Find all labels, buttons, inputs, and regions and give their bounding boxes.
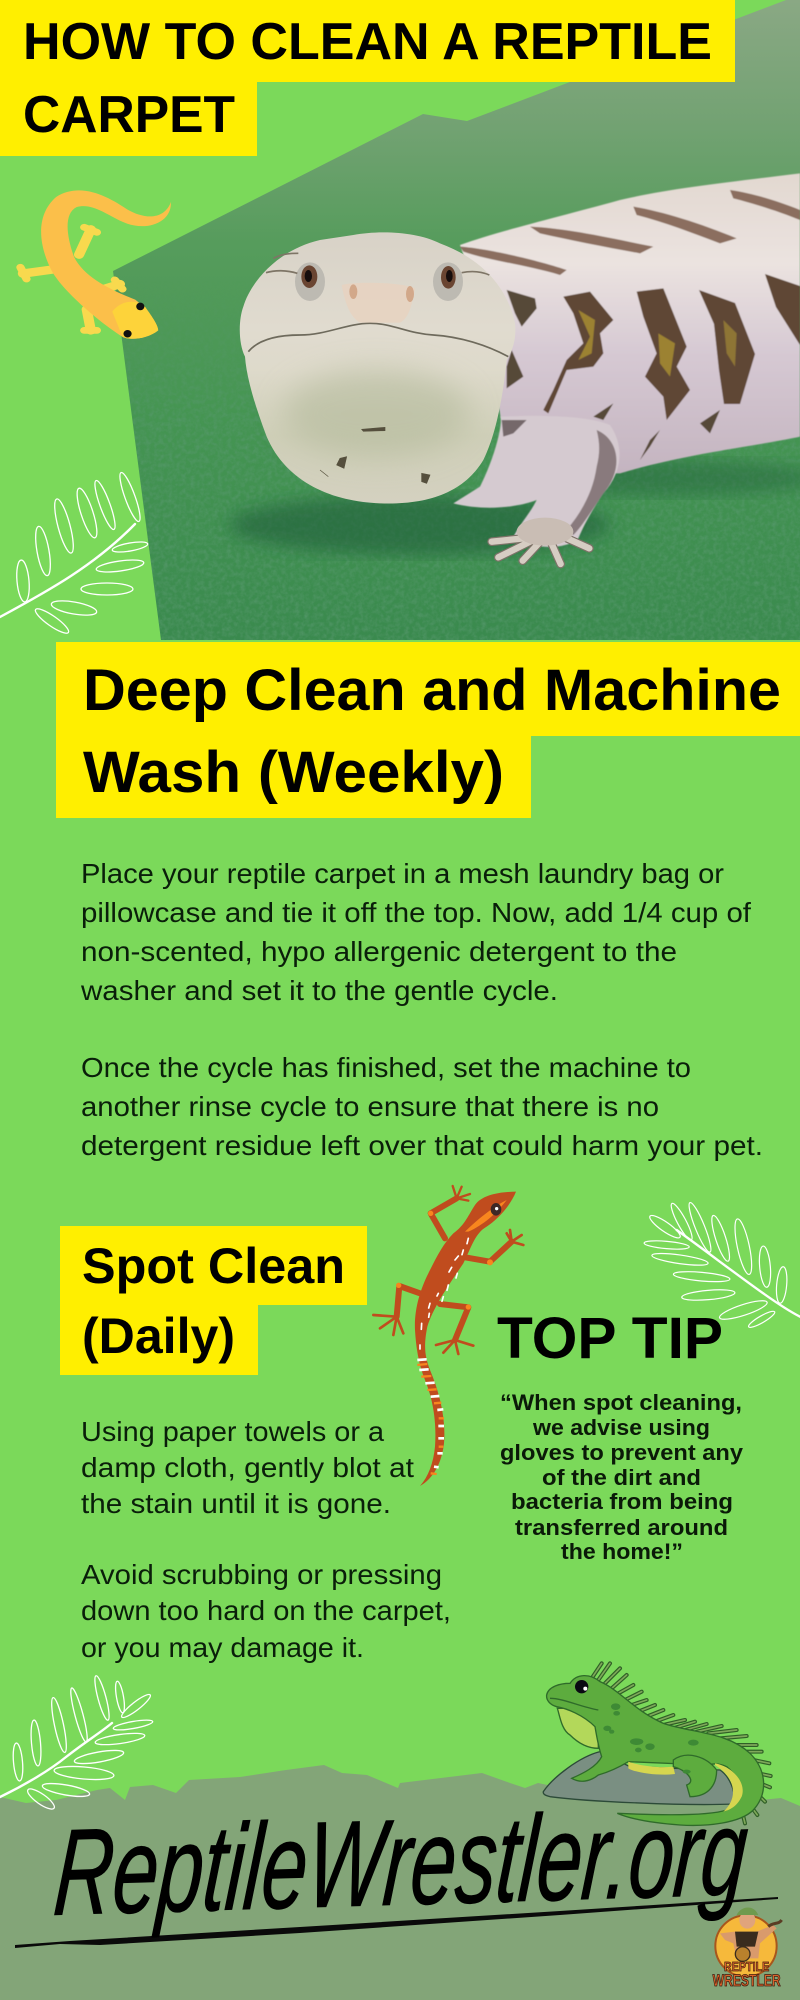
decorative leaf: bottom left: [0, 1675, 153, 1812]
icon: green iguana on rock: [543, 1663, 771, 1825]
icon: orange lizard: [373, 1186, 523, 1486]
heading: spot clean daily: [60, 1226, 367, 1375]
logo: reptile wrestler badge: REPTILE: [724, 1960, 769, 1974]
heading: deep clean and machine wash: Wash (Weekly): [83, 740, 504, 805]
text block: spot clean instructions: the stain until it is gone.: [81, 1488, 391, 1519]
decorative leaf: left of photo: [0, 471, 148, 637]
text block: spot clean instructions: or you may damage it.: [81, 1632, 364, 1663]
text block: spot clean instructions: Using paper towels or a: [81, 1416, 385, 1447]
text block: machine wash instructions: Place your reptile carpet in a mesh laundry bag or: [81, 858, 724, 889]
title banner: HOW TO CLEAN A REPTILE: [23, 13, 712, 71]
heading: spot clean daily: Spot Clean: [82, 1238, 345, 1294]
heading: deep clean and machine wash: [56, 642, 800, 818]
top tip quote: “When spot cleaning,: [500, 1390, 742, 1415]
text block: machine wash instructions: pillowcase and tie it off the top. Now, add 1/4 cup of: [81, 897, 751, 928]
top tip quote: we advise using: [532, 1415, 710, 1440]
text block: spot clean instructions: damp cloth, gently blot at: [81, 1452, 414, 1483]
text block: machine wash instructions: Once the cycle has finished, set the machine to: [81, 1052, 691, 1083]
top tip quote: gloves to prevent any: [500, 1440, 744, 1465]
logo: reptile wrestler badge: [713, 1907, 782, 1990]
top tip heading: TOP TIP: [497, 1306, 723, 1371]
top tip quote: of the dirt and: [542, 1465, 701, 1490]
brush underline: [15, 1897, 778, 1948]
top tip quote: [500, 1390, 744, 1564]
text block: spot clean instructions: [81, 1416, 451, 1663]
text block: machine wash instructions: non-scented, hypo allergenic detergent to the: [81, 936, 677, 967]
text block: machine wash instructions: detergent residue left over that could harm your pet.: [81, 1130, 763, 1161]
text block: machine wash instructions: another rinse cycle to ensure that there is no: [81, 1091, 659, 1122]
title banner: CARPET: [23, 86, 235, 144]
heading: spot clean daily: (Daily): [82, 1308, 235, 1364]
heading: deep clean and machine wash: Deep Clean and Machine: [83, 658, 781, 723]
text block: machine wash instructions: washer and set it to the gentle cycle.: [80, 975, 558, 1006]
text block: spot clean instructions: Avoid scrubbing or pressing: [81, 1559, 442, 1590]
footer band: [0, 1765, 800, 2000]
icon: yellow gecko: [20, 190, 171, 339]
top tip quote: bacteria from being: [511, 1489, 733, 1514]
top tip quote: transferred around: [515, 1515, 728, 1540]
top tip quote: the home!”: [561, 1539, 683, 1564]
text block: machine wash instructions: [80, 858, 763, 1161]
photo: blue-tongued skink on green carpet: [100, 0, 800, 640]
text block: spot clean instructions: down too hard on the carpet,: [81, 1595, 451, 1626]
title banner: [0, 0, 735, 156]
decorative leaf: right of top tip: [644, 1201, 800, 1330]
